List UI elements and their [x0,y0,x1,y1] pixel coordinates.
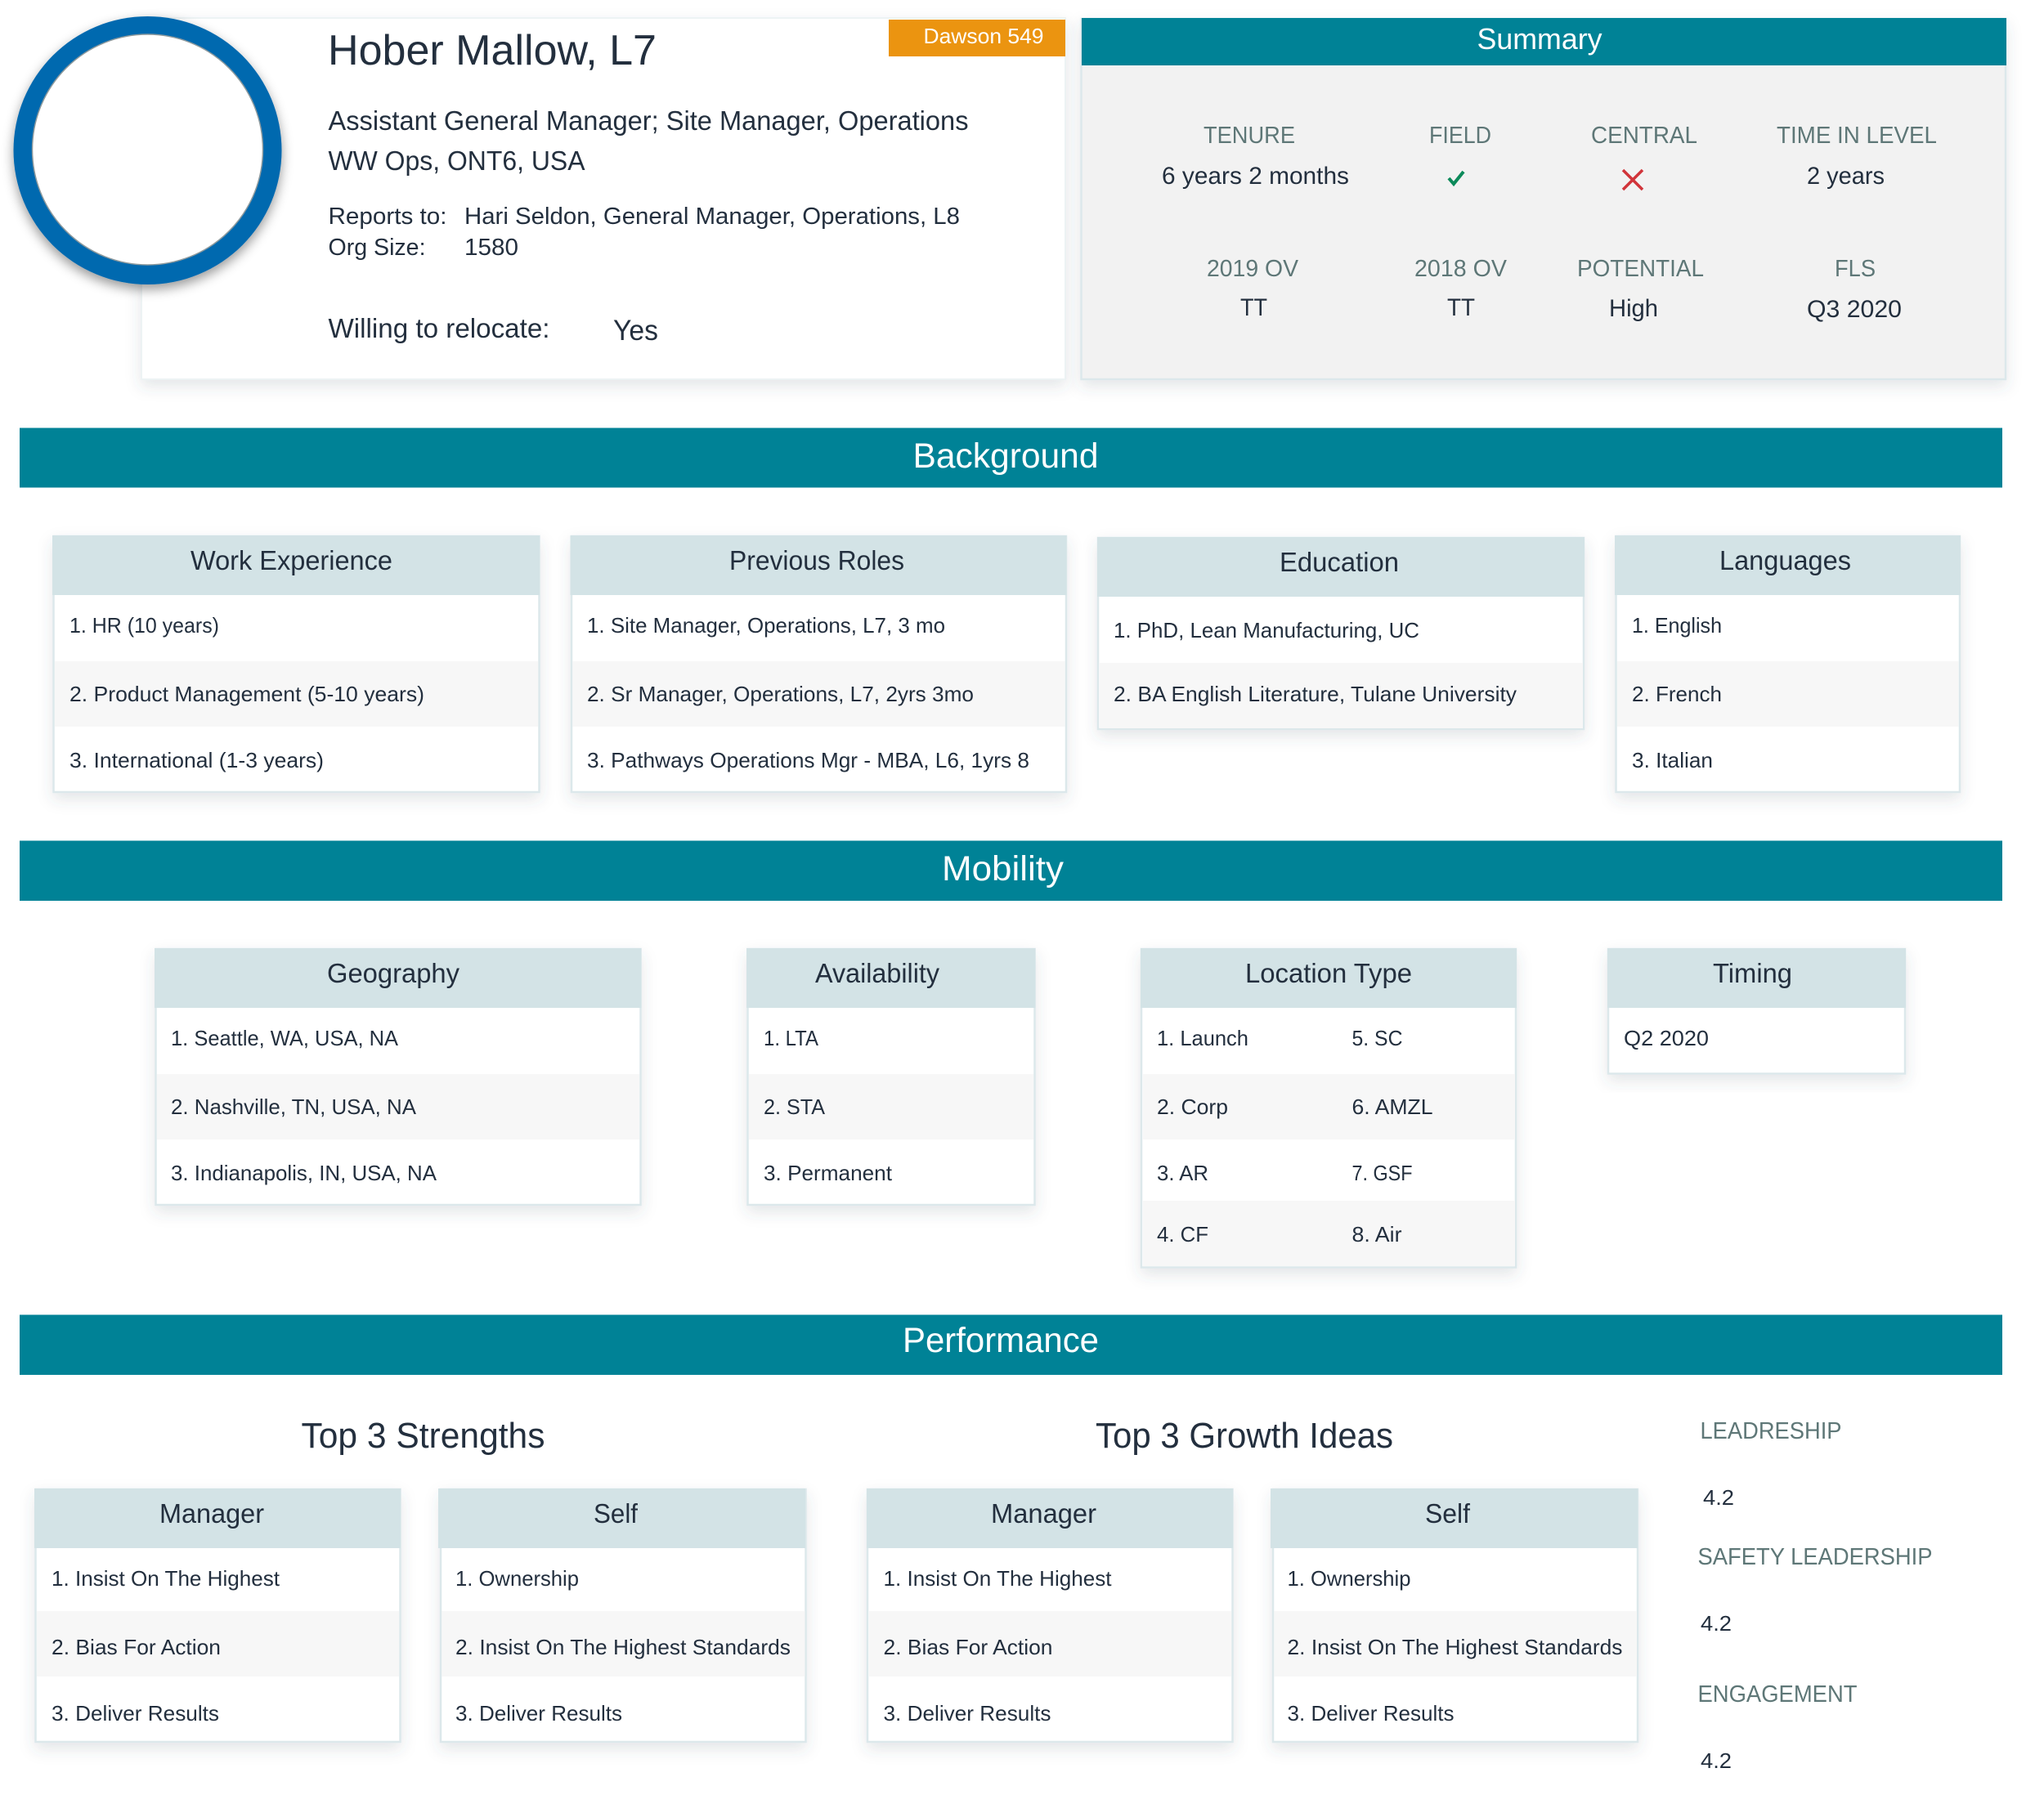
panel: location type: 2. Corp [1157,1094,1228,1119]
org size: Org Size: [329,235,425,261]
metric: tenure [1162,123,1349,190]
panel: geography [155,948,641,1205]
panel: strengths self: 3. Deliver Results [455,1701,622,1726]
panel: education: 2. BA English Literature, Tulane University [1114,682,1517,706]
metric: potential: High [1609,295,1658,322]
panel: timing: Timing [1713,958,1792,988]
willing to relocate [329,313,658,347]
panel: location type: 3. AR [1157,1161,1208,1185]
score: safety leadership [1697,1544,1933,1636]
metric: field [1429,123,1491,184]
panel: location type: 7. GSF [1352,1161,1413,1185]
score: safety leadership: 4.2 [1701,1611,1732,1636]
panel: availability: 3. Permanent [764,1161,893,1185]
panel: education: 1. PhD, Lean Manufacturing, UC [1114,618,1419,642]
section bar: performance: Performance [903,1321,1099,1360]
panel: strengths self: 1. Ownership [455,1566,579,1591]
metric: time in level [1777,123,1937,190]
metric: 2019 OV: TT [1240,294,1267,321]
panel: strengths manager: 3. Deliver Results [52,1701,219,1726]
heading: top 3 strengths: Top 3 Strengths [301,1416,545,1456]
org size: 1580 [464,235,518,261]
panel: previous roles: Previous Roles [729,545,904,575]
metric: 2018 OV [1414,256,1508,321]
panel: location type: 8. Air [1352,1222,1402,1247]
metric: 2018 OV: TT [1447,294,1475,321]
panel: languages [1615,535,1961,792]
section bar: mobility [20,840,2002,901]
panel: strengths self: Self [594,1498,639,1529]
panel: strengths manager: Manager [159,1498,264,1529]
metric: 2019 OV [1207,256,1299,321]
summary heading: Summary [1477,22,1602,56]
panel: timing [1607,948,1906,1074]
metric: FLS [1807,256,1902,323]
metric: field: FIELD [1429,123,1491,149]
score: engagement [1697,1681,1858,1773]
panel: growth self: 2. Insist On The Highest Standards [1287,1635,1622,1659]
panel: work experience: Work Experience [191,545,392,575]
section bar: background: Background [912,436,1099,476]
panel: geography: 2. Nashville, TN, USA, NA [171,1094,417,1119]
icon: red cross [1623,170,1643,190]
score: engagement: ENGAGEMENT [1697,1681,1858,1708]
section bar: background [20,428,2002,487]
panel: location type [1141,948,1517,1267]
panel: availability [746,948,1035,1205]
panel: growth manager: 1. Insist On The Highest [883,1566,1112,1591]
badge: Dawson 549: Dawson 549 [924,24,1043,48]
org size [329,235,518,261]
metric: 2018 OV: 2018 OV [1414,256,1508,282]
panel: growth self: 3. Deliver Results [1287,1701,1454,1726]
metric: FLS: Q3 2020 [1807,296,1902,323]
icon: avatar ring [13,16,281,284]
reports to: Hari Seldon, General Manager, Operations, L8 [464,204,960,230]
panel: location type: 4. CF [1157,1222,1208,1247]
panel: growth self: Self [1425,1498,1471,1529]
willing to relocate: Willing to relocate: [329,313,549,343]
panel: previous roles: 3. Pathways Operations Mgr - MBA, L6, 1yrs 8 [587,748,1029,772]
panel: growth manager [867,1488,1233,1742]
name heading: Hober Mallow, L7 [328,27,657,74]
metric: tenure: TENURE [1204,123,1295,149]
score: safety leadership: SAFETY LEADERSHIP [1697,1544,1933,1570]
metric: central: CENTRAL [1591,123,1697,149]
panel: work experience: 1. HR (10 years) [69,613,219,638]
panel: growth manager: Manager [991,1498,1096,1529]
panel: education [1097,537,1585,729]
panel: strengths manager [34,1488,401,1742]
panel: growth self [1271,1488,1638,1742]
panel: strengths manager: 2. Bias For Action [52,1635,221,1659]
job title: Assistant General Manager; Site Manager, Operations [329,105,968,136]
panel: location type: 6. AMZL [1352,1094,1432,1119]
panel: growth manager: 2. Bias For Action [883,1635,1053,1659]
panel: profile card [141,18,1065,379]
panel: availability: 1. LTA [764,1026,819,1050]
score: leadership [1701,1418,1841,1510]
metric: potential [1577,256,1704,322]
panel: growth manager: 3. Deliver Results [883,1701,1051,1726]
panel: geography: Geography [327,958,459,988]
panel: languages: 2. French [1632,682,1722,706]
score: leadership: LEADRESHIP [1701,1418,1841,1444]
metric: tenure: 6 years 2 months [1162,163,1349,190]
panel: geography: 3. Indianapolis, IN, USA, NA [171,1161,437,1185]
panel: previous roles: 2. Sr Manager, Operations, L7, 2yrs 3mo [587,682,974,706]
panel: previous roles: 1. Site Manager, Operations, L7, 3 mo [587,613,945,638]
panel: work experience: 3. International (1-3 years) [69,748,324,772]
panel: previous roles [571,535,1066,792]
score: leadership: 4.2 [1703,1485,1734,1510]
heading: top 3 growth ideas: Top 3 Growth Ideas [1096,1416,1393,1456]
reports to: Reports to: [329,204,446,230]
panel: availability: Availability [815,958,939,988]
metric: time in level: 2 years [1807,163,1885,190]
panel: timing: Q2 2020 [1624,1026,1709,1050]
panel: strengths self [438,1488,806,1742]
panel: languages: 1. English [1632,613,1722,638]
panel: location type: 1. Launch [1157,1026,1248,1050]
panel: languages: Languages [1719,545,1851,575]
badge: Dawson 549 [889,20,1065,56]
section bar: performance [20,1314,2002,1375]
panel: geography: 1. Seattle, WA, USA, NA [171,1026,399,1050]
panel: growth self: 1. Ownership [1287,1566,1411,1591]
panel: location type: 5. SC [1352,1026,1403,1050]
metric: FLS: FLS [1835,256,1876,282]
section bar: mobility: Mobility [942,849,1065,889]
org and location: WW Ops, ONT6, USA [329,145,585,176]
panel: education: Education [1280,547,1399,577]
panel: work experience: 2. Product Management (5-10 years) [69,682,424,706]
icon: green check [1449,172,1464,184]
panel: languages: 3. Italian [1632,748,1713,772]
metric: 2019 OV: 2019 OV [1207,256,1299,282]
panel: availability: 2. STA [764,1094,826,1119]
panel: work experience [52,535,540,792]
score: engagement: 4.2 [1701,1748,1732,1773]
panel: strengths manager: 1. Insist On The Highest [52,1566,280,1591]
willing to relocate: Yes [613,315,658,347]
metric: central [1591,123,1697,190]
metric: potential: POTENTIAL [1577,256,1704,282]
panel: location type: Location Type [1245,958,1412,988]
panel: summary [1081,18,2006,379]
metric: time in level: TIME IN LEVEL [1777,123,1937,149]
panel: strengths self: 2. Insist On The Highest Standards [455,1635,791,1659]
